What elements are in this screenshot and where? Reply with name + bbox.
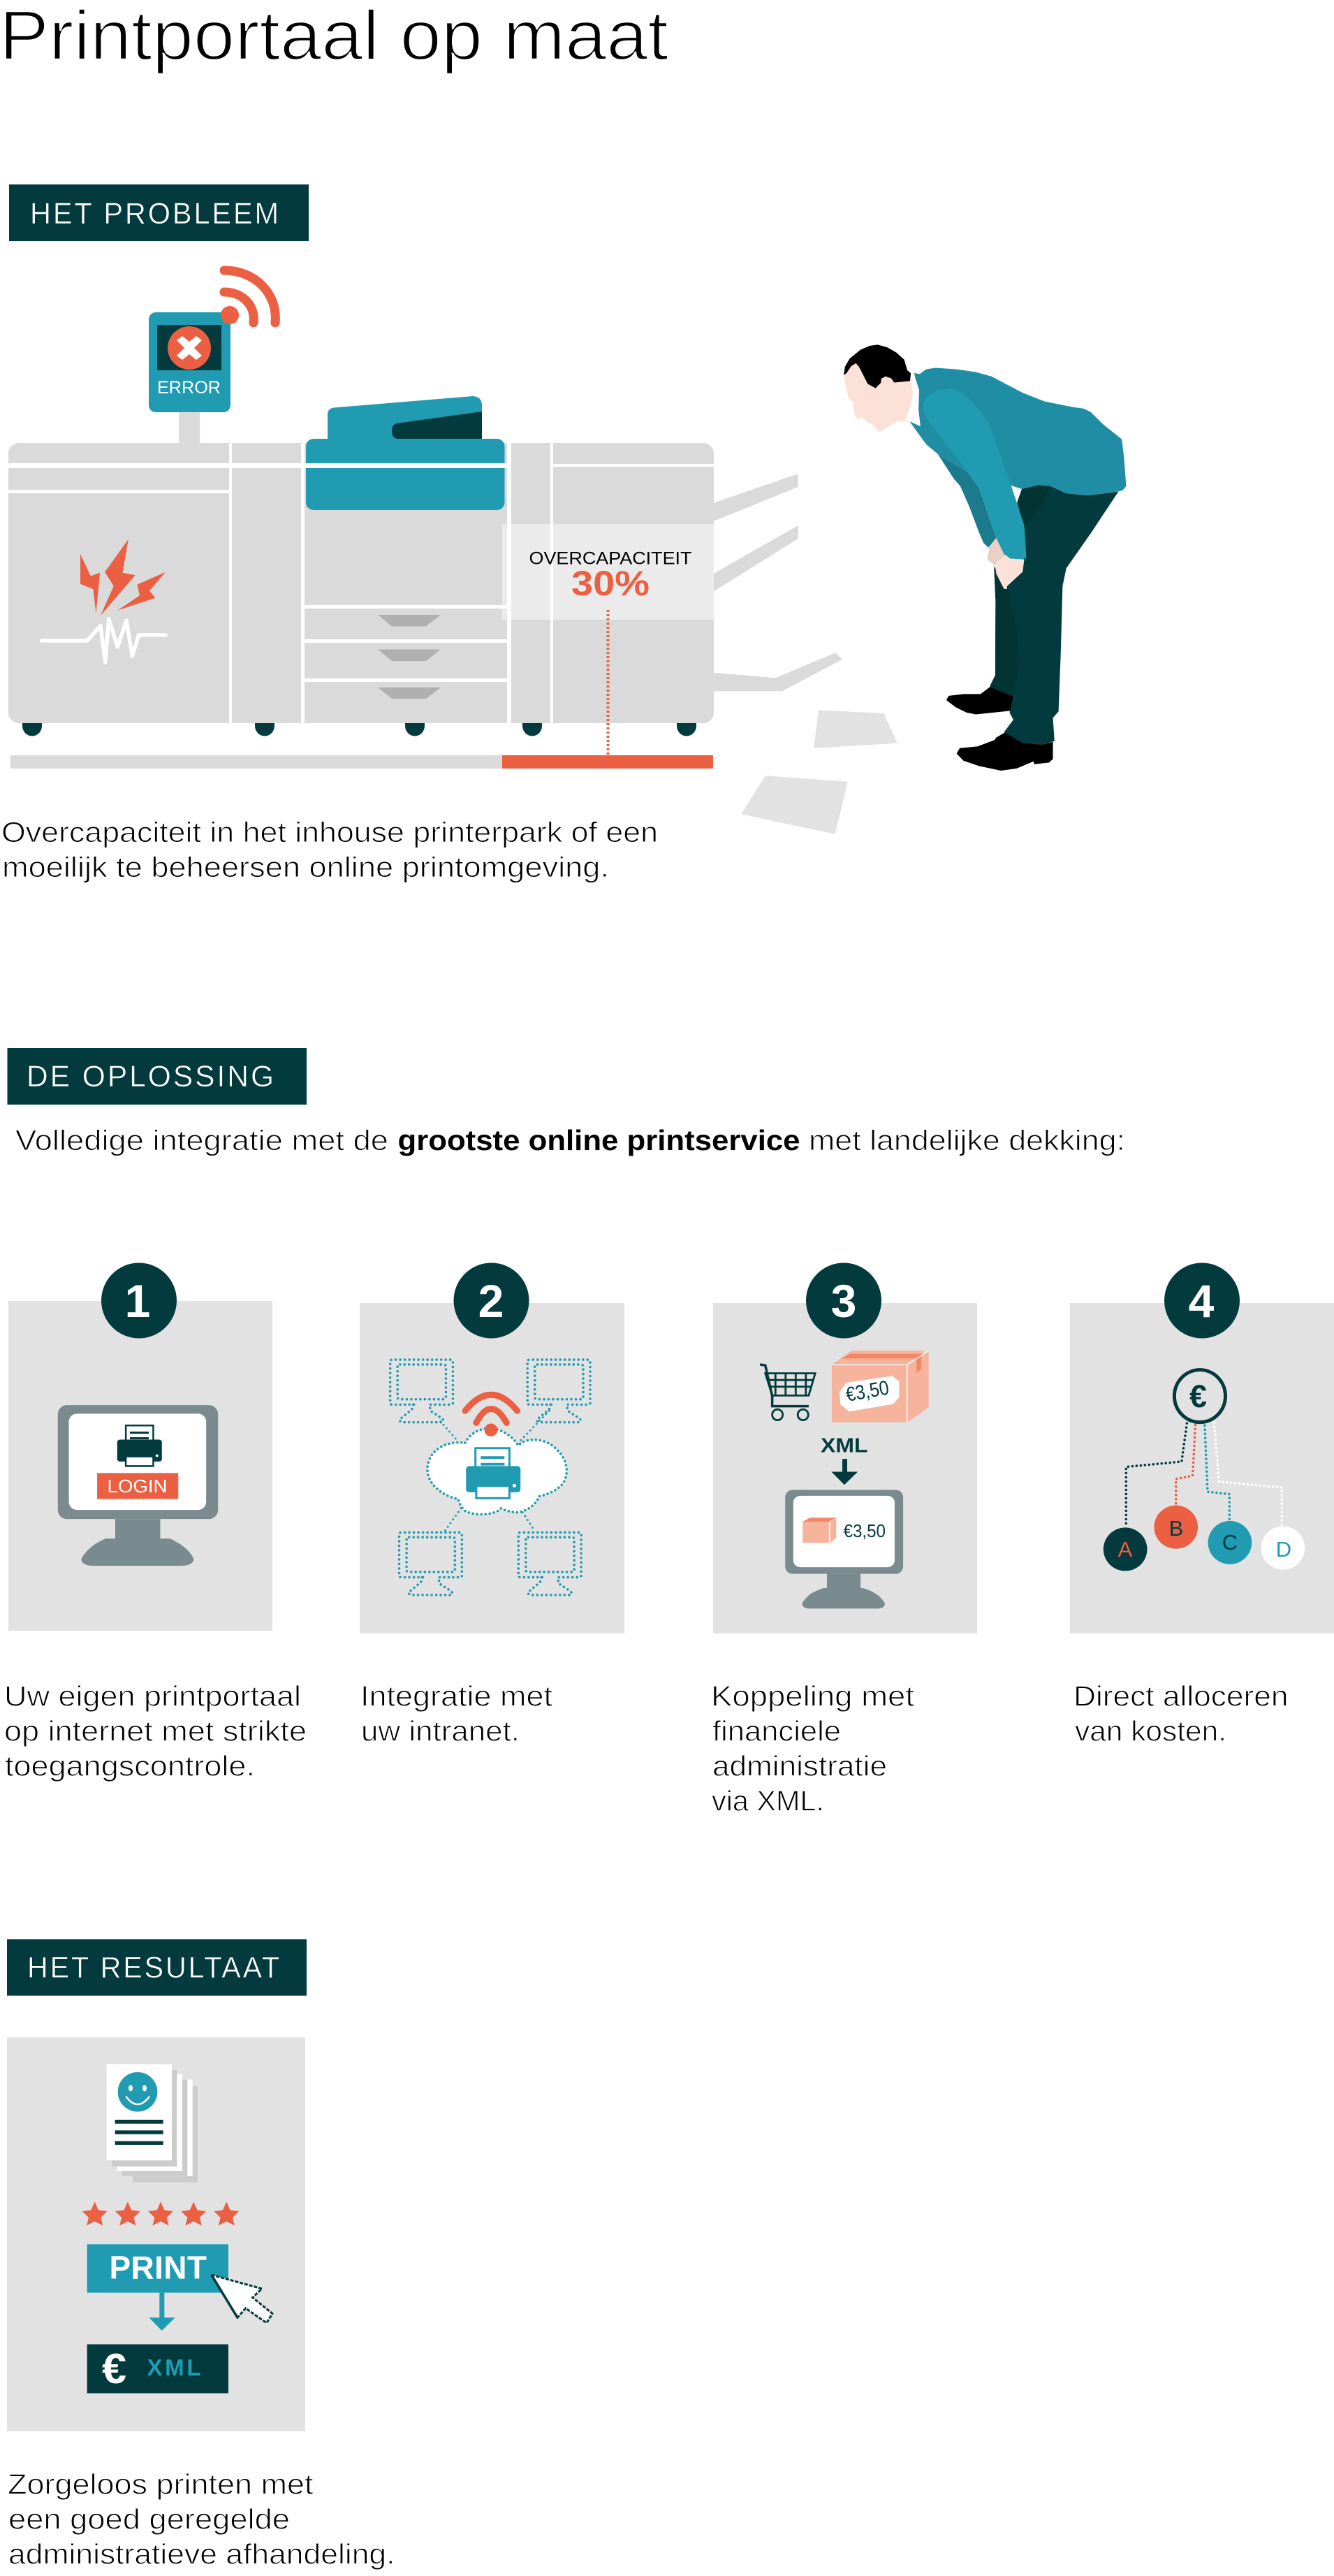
- heading: het probleem: HET PROBLEEM: [30, 197, 281, 231]
- capacity bar: [10, 755, 713, 769]
- solution intro text: met landelijke dekking:: [809, 1124, 1125, 1156]
- callout: overcapaciteit 30%: OVERCAPACITEIT: [529, 549, 691, 569]
- panel: step 3 financial XML: €3,50: [844, 1377, 890, 1406]
- number badge 2: 2: [478, 1275, 504, 1327]
- panel: result: [7, 2037, 305, 2431]
- solution intro text: grootste online printservice: [398, 1124, 800, 1156]
- panel: step 4 cost allocation: B: [1169, 1516, 1183, 1541]
- icon: wifi signal: [465, 1395, 518, 1436]
- step 1 caption: Uw eigen printportaal: [4, 1680, 301, 1712]
- panel: step 1 portal login: [8, 1301, 272, 1631]
- heading: de oplossing: [7, 1048, 307, 1105]
- panel: step 2 intranet cloud: [360, 1303, 624, 1633]
- heading: het resultaat: HET RESULTAAT: [27, 1951, 281, 1985]
- panel: step 1 portal login: LOGIN: [108, 1476, 168, 1497]
- result caption: een goed geregelde: [8, 2503, 290, 2535]
- result caption: [8, 2468, 395, 2570]
- panel: step 4 cost allocation: C: [1222, 1530, 1238, 1555]
- step 1 caption: op internet met strikte: [4, 1715, 307, 1747]
- panel: result: €: [102, 2345, 126, 2392]
- problem description: [1, 816, 658, 883]
- xml box: [87, 2344, 228, 2393]
- solution intro text: Volledige integratie met de: [15, 1124, 388, 1156]
- step 2 caption: Integratie met: [360, 1680, 553, 1712]
- step 4 caption: Direct alloceren: [1073, 1680, 1288, 1712]
- panel: step 4 cost allocation: €: [1189, 1378, 1207, 1414]
- icon: teal printer: [466, 1448, 520, 1498]
- printer scanner top: [306, 396, 505, 510]
- dotted connectors: [1126, 1422, 1282, 1527]
- number badge 1: [101, 1263, 177, 1339]
- number badge 4: [1164, 1263, 1240, 1339]
- icon: stack of documents: [107, 2064, 198, 2182]
- solution intro text: [15, 1124, 1125, 1156]
- icon: dotted cloud: [427, 1428, 566, 1514]
- panel: step 4 cost allocation: [1070, 1303, 1334, 1633]
- step 2 caption: [360, 1680, 553, 1747]
- callout: overcapaciteit 30%: [502, 524, 714, 755]
- heading: het resultaat: [7, 1940, 307, 1995]
- icon: wifi signal: [221, 270, 275, 324]
- wheels: [22, 723, 696, 736]
- panel: step 4 cost allocation: D: [1276, 1537, 1291, 1562]
- icon: dotted monitors: [390, 1360, 590, 1595]
- number badge 4: 4: [1189, 1275, 1215, 1327]
- print button: [87, 2244, 228, 2293]
- heading: het probleem: [9, 184, 309, 241]
- panel: result: PRINT: [109, 2250, 207, 2286]
- step 2 caption: uw intranet.: [361, 1715, 520, 1747]
- result caption: administratieve afhandeling.: [8, 2538, 395, 2570]
- number badge 3: 3: [831, 1275, 856, 1327]
- cost nodes: [1104, 1506, 1305, 1571]
- step 3 caption: [711, 1680, 915, 1817]
- printer trays and loose paper: [714, 474, 897, 834]
- printer machine body: [8, 443, 714, 723]
- step 4 caption: van kosten.: [1075, 1715, 1226, 1747]
- icon: five stars: [82, 2202, 239, 2225]
- result caption: Zorgeloos printen met: [8, 2468, 314, 2500]
- icon: mouse cursor: [212, 2275, 272, 2323]
- icon: box with price tag: [832, 1351, 929, 1422]
- panel: step 3 financial XML: [713, 1303, 977, 1633]
- step 3 caption: Koppeling met: [711, 1680, 915, 1712]
- printer illustration: [8, 270, 897, 834]
- error display: [149, 312, 230, 412]
- icon: euro circle: [1174, 1370, 1226, 1422]
- problem description: Overcapaciteit in het inhouse printerpark of een: [1, 816, 658, 848]
- step 1 caption: [4, 1680, 307, 1782]
- error display: ERROR: [157, 378, 221, 398]
- step 3 caption: administratie: [712, 1750, 887, 1782]
- icon: monitor with printer: [58, 1405, 218, 1566]
- icon: error lightning and pulse: [42, 539, 166, 662]
- step 1 caption: toegangscontrole.: [5, 1750, 255, 1782]
- problem description: moeilijk te beheersen online printomgeving.: [2, 851, 609, 883]
- number badge 1: 1: [125, 1275, 150, 1327]
- panel: result: XML: [147, 2355, 201, 2380]
- number badge 2: [454, 1263, 529, 1339]
- panel: step 4 cost allocation: A: [1118, 1537, 1133, 1562]
- number badge 3: [806, 1263, 881, 1339]
- arrow: print to xml: [149, 2293, 175, 2331]
- step 3 caption: financiele: [712, 1715, 841, 1747]
- icon: shopping cart: [760, 1365, 815, 1420]
- arrow: xml down: [831, 1459, 858, 1485]
- step 3 caption: via XML.: [712, 1785, 824, 1817]
- icon: monitor with box: [785, 1490, 903, 1608]
- heading: de oplossing: DE OPLOSSING: [27, 1060, 276, 1093]
- callout: overcapaciteit 30%: 30%: [571, 564, 650, 603]
- panel: step 3 financial XML: €3,50: [844, 1520, 886, 1541]
- panel: step 3 financial XML: XML: [821, 1435, 867, 1457]
- man looking at printer: [844, 344, 1126, 771]
- paper drawers: [378, 615, 441, 699]
- icon: error display pole: [179, 412, 200, 444]
- step 4 caption: [1073, 1680, 1288, 1747]
